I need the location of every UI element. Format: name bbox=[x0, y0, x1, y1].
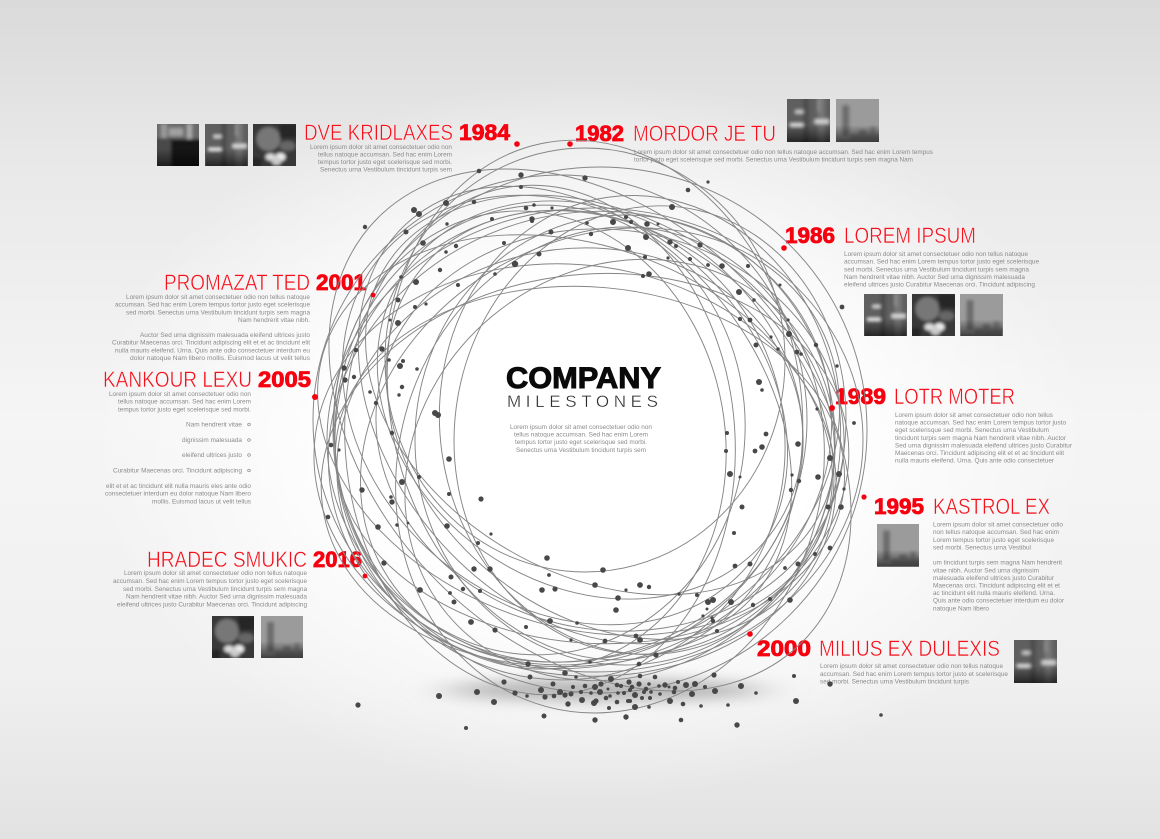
center text: tempus tortor justo eget scelerisque sed morbi. bbox=[515, 439, 647, 446]
center text: Lorem ipsum dolor sit amet consectetuer odio non bbox=[510, 424, 652, 431]
heading 1989 bbox=[835, 384, 1015, 409]
text 2001: nulla mauris eleifend. Urna. Quis ante odio consectetuer interdum eu bbox=[115, 347, 310, 354]
text 1995: malesuada eleifend ultrices justo Curabitur bbox=[933, 575, 1055, 582]
heading 2005: KANKOUR LEXU bbox=[103, 367, 252, 392]
heading 1982 bbox=[575, 121, 776, 146]
text 1986: accumsan. Sed hac enim Lorem tempus tortor justo eget scelerisque bbox=[844, 259, 1039, 266]
text 2016: Lorem ipsum dolor sit amet consectetuer odio non tellus natoque bbox=[124, 570, 307, 577]
text 2005: tellus natoque accumsan. Sed hac enim Lorem bbox=[118, 399, 251, 406]
heading 2001: 2001 bbox=[316, 270, 366, 295]
photos 2016 bbox=[206, 610, 309, 664]
text 1995: Lorem ipsum dolor sit amet consectetuer odio bbox=[933, 522, 1063, 528]
text 2000: sed morbi. Senectus urna Vestibulum tincidunt turpis bbox=[820, 679, 970, 686]
heading 1995: KASTROL EX bbox=[933, 494, 1050, 519]
text 2005 bbox=[105, 391, 252, 505]
text 1995: Lorem tempus tortor justo eget scelerisque bbox=[933, 537, 1054, 544]
tangled ring lines bbox=[226, 66, 954, 794]
heading 1986 bbox=[785, 223, 976, 248]
text 1995 bbox=[933, 522, 1065, 612]
red milestone markers bbox=[312, 141, 867, 637]
text 1982: tortor justo eget scelerisque sed morbi. Senectus urna Vestibulum tincidunt turpis sem magna Nam bbox=[634, 157, 913, 164]
text 1989: natoque accumsan. Sed hac enim Lorem tempus tortor justo bbox=[895, 420, 1066, 427]
text 1986 bbox=[844, 251, 1039, 289]
text 2001: Lorem ipsum dolor sit amet consectetuer odio non tellus natoque bbox=[126, 294, 310, 301]
text 2001: Nam hendrerit vitae nibh. bbox=[238, 317, 310, 324]
heading 1984: DVE KRIDLAXES bbox=[304, 120, 453, 145]
title: company: COMPANY bbox=[506, 362, 661, 395]
text 1995: ac tincidunt elit nulla mauris eleifend. Urna. bbox=[933, 590, 1055, 597]
heading 2000: MILIUS EX DULEXIS bbox=[819, 636, 1000, 661]
photo 2000 bbox=[1008, 634, 1063, 689]
text 2000: accumsan. Sed hac enim Lorem tempus tortor justo et scelerisque bbox=[820, 671, 1008, 678]
photos 1984 bbox=[151, 118, 302, 172]
milestone: 2001 Promazat ted bbox=[112, 270, 366, 362]
text 1995: Quis ante odio consectetuer interdum eu dolor bbox=[933, 598, 1065, 605]
text 1995: Maecenas orci. Tincidunt adipiscing elit et et bbox=[933, 582, 1060, 590]
text 1989: eget scelerisque sed morbi. Senectus urna Vestibulum bbox=[895, 427, 1049, 434]
milestone: 1982 Mordor je tu bbox=[575, 93, 934, 164]
center text: tellus natoque accumsan. Sed hac enim Lorem bbox=[514, 432, 648, 439]
bullet list 2005 bbox=[113, 422, 250, 474]
dots on the rings bbox=[326, 169, 856, 679]
heading 1989: 1989 bbox=[835, 384, 886, 409]
text 2016: eleifend ultrices justo Curabitur Maecenas orci. Tincidunt adipiscing bbox=[117, 602, 307, 608]
center text bbox=[510, 424, 652, 454]
photos 1986 bbox=[858, 288, 1008, 342]
heading 2016: 2016 bbox=[313, 547, 362, 572]
text 2005: tempus tortor justo eget scelerisque sed morbi. bbox=[118, 406, 251, 413]
photos 1982 bbox=[781, 93, 885, 148]
text 1995: natoque Nam libero bbox=[933, 605, 989, 612]
text 1982: Lorem ipsum dolor sit amet consectetuer odio non tellus natoque accumsan. Sed hac enim Lorem tempus bbox=[634, 149, 934, 156]
heading 2016: HRADEC SMUKIC bbox=[147, 547, 307, 572]
heading 1995 bbox=[874, 494, 1050, 519]
text 2016 bbox=[113, 570, 307, 608]
text 2001: dolor natoque Nam libero mollis. Euismod lacus ut velit tellus bbox=[130, 355, 311, 362]
milestone: 1984 Dve Kridlaxes bbox=[151, 118, 511, 174]
text 2000 bbox=[820, 663, 1008, 686]
center title bbox=[506, 362, 661, 454]
heading 1982: 1982 bbox=[575, 121, 624, 146]
heading 1989: LOTR MOTER bbox=[894, 384, 1015, 409]
text 1982 bbox=[634, 149, 934, 164]
milestone: 1989 Lotr moter bbox=[835, 384, 1073, 465]
text 1984: Senectus urna Vestibulum tincidunt turpis sem bbox=[320, 166, 452, 174]
text 1984: tempus tortor justo eget scelerisque sed morbi. bbox=[318, 159, 452, 166]
text 1989: tincidunt turpis sem magna Nam hendrerit vitae nibh. Auctor bbox=[895, 435, 1067, 442]
text 1989: Maecenas orci. Tincidunt adipiscing elit et et ac tincidunt elit bbox=[895, 450, 1064, 457]
text 2005: mollis. Euismod lacus ut velit tellus bbox=[152, 498, 252, 505]
text 2016: Nam hendrerit vitae nibh. Auctor Sed urna dignissim malesuada bbox=[126, 594, 307, 601]
heading 2001: PROMAZAT TED bbox=[164, 270, 310, 295]
text 2005: elit et et ac tincidunt elit nulla mauris eles ante odio bbox=[106, 483, 251, 490]
text 1989: Lorem ipsum dolor sit amet consectetuer odio non tellus bbox=[895, 412, 1054, 419]
milestone: 1995 Kastrol ex bbox=[871, 494, 1065, 612]
bullet list 2005: Nam hendrerit vitae bbox=[186, 422, 242, 428]
text 1995: vitae nibh. Auctor Sed urna dignissim bbox=[933, 567, 1039, 574]
heading 1986: LOREM IPSUM bbox=[844, 223, 976, 248]
heading 1984: 1984 bbox=[459, 120, 511, 145]
text 1995: um tincidunt turpis sem magna Nam hendrerit bbox=[933, 560, 1062, 567]
text 2001: accumsan. Sed hac enim Lorem tempus tortor justo eget scelerisque bbox=[115, 302, 310, 309]
text 1995: non tellus natoque accumsan. Sed hac enim bbox=[933, 529, 1059, 536]
photo 1995 bbox=[871, 518, 925, 572]
text 1986: sed morbi. Senectus urna Vestibulum tincidunt turpis sem magna bbox=[844, 266, 1029, 273]
text 2016: accumsan. Sed hac enim Lorem tempus tortor justo eget scelerisque bbox=[113, 578, 307, 585]
center text: Senectus urna Vestibulum tincidunt turpis sem bbox=[516, 447, 646, 454]
text 1984 bbox=[310, 144, 452, 174]
heading 2005: 2005 bbox=[258, 367, 311, 392]
text 1986: eleifend ultrices justo Curabitur Maecenas orci. Tincidunt adipiscing bbox=[844, 282, 1035, 289]
text 2005: Lorem ipsum dolor sit amet consectetuer odio non bbox=[109, 391, 251, 398]
bullet list 2005: eleifend ultrices justo bbox=[182, 452, 242, 459]
milestone: 2000 Milius ex dulexis bbox=[757, 634, 1063, 689]
heading 1995: 1995 bbox=[874, 494, 924, 519]
ground shadow bbox=[445, 679, 765, 701]
milestone: 1986 Lorem ipsum bbox=[785, 223, 1039, 342]
text 2005: consectetuer interdum eu dolor natoque Nam libero bbox=[105, 491, 251, 498]
text 1984: Lorem ipsum dolor sit amet consectetuer odio non bbox=[310, 144, 452, 151]
heading 1986: 1986 bbox=[785, 223, 835, 248]
text 1986: Nam hendrerit vitae nibh. Auctor Sed urna dignissim malesuada bbox=[844, 274, 1025, 281]
heading 2000 bbox=[757, 636, 1000, 661]
text 2000: Lorem ipsum dolor sit amet consectetuer odio non tellus natoque bbox=[820, 663, 1003, 670]
scattered dots on the floor bbox=[355, 672, 883, 730]
text 1989: nulla mauris eleifend. Urna. Quis ante odio consectetuer bbox=[895, 458, 1055, 465]
text 2016: sed morbi. Senectus urna Vestibulum tincidunt turpis sem magna bbox=[123, 586, 307, 593]
text 1984: tellus natoque accumsan. Sed hac enim Lorem bbox=[318, 152, 452, 158]
heading 1982: MORDOR JE TU bbox=[633, 121, 776, 146]
bullet list 2005: dignissim malesuada bbox=[182, 437, 242, 444]
milestone: 2016 Hradec smukic bbox=[113, 547, 362, 664]
text 2001: Auctor Sed urna dignissim malesuada eleifend ultrices justo bbox=[140, 332, 310, 339]
text 1989 bbox=[895, 412, 1073, 465]
text 1989: Sed urna dignissim malesuada eleifend ultrices justo Curabitur bbox=[895, 442, 1073, 449]
text 1986: Lorem ipsum dolor sit amet consectetuer odio non tellus natoque bbox=[844, 251, 1028, 258]
text 2001: Curabitur Maecenas orci. Tincidunt adipiscing elit et et ac tincidunt elit bbox=[112, 340, 310, 347]
text 2001 bbox=[112, 294, 311, 362]
text 2001: sed morbi. Senectus urna Vestibulum tincidunt turpis sem magna bbox=[126, 309, 310, 316]
heading 2000: 2000 bbox=[757, 636, 811, 661]
subtitle: milestones: MILESTONES bbox=[507, 392, 658, 411]
bullet list 2005: Curabitur Maecenas orci. Tincidunt adipiscing bbox=[113, 468, 242, 474]
text 1995: sed morbi. Senectus urna Vestibul bbox=[933, 545, 1031, 552]
milestone: 2005 Kankour lexu bbox=[103, 367, 311, 505]
